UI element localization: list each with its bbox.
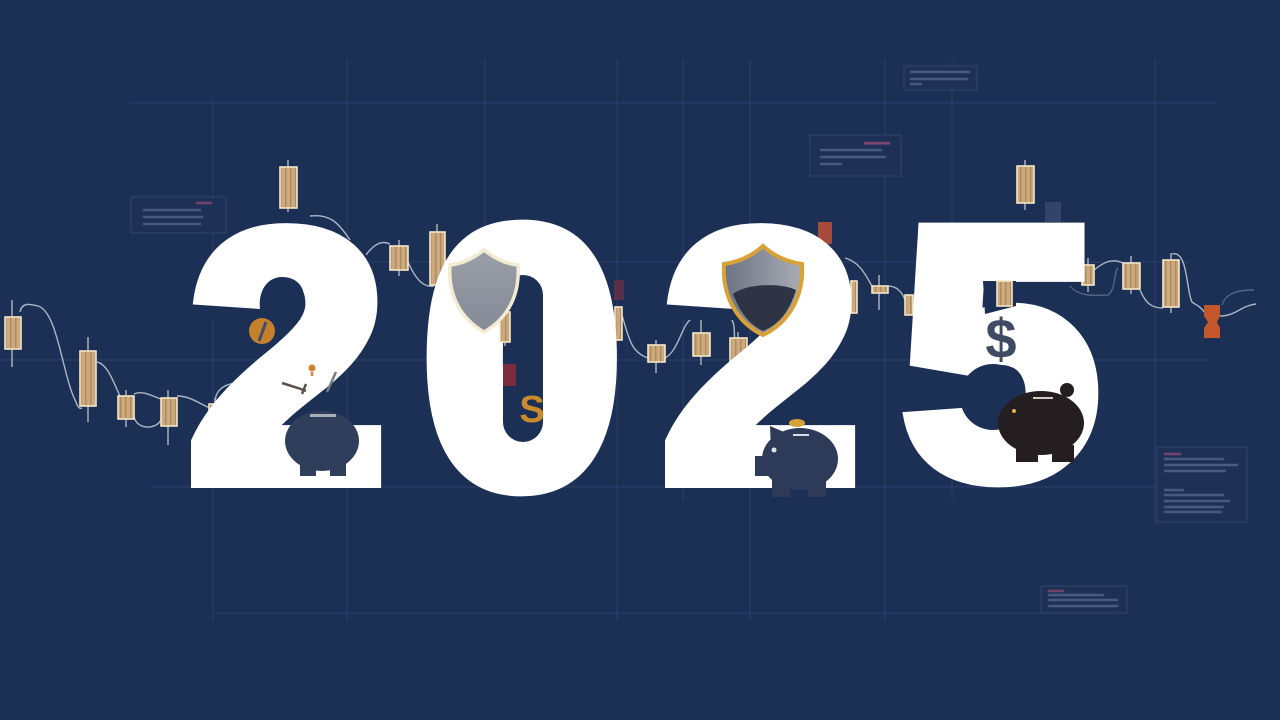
- candle 1: [5, 300, 21, 367]
- candle 7: [390, 240, 408, 276]
- panel: centre top note: [810, 135, 901, 176]
- panel: lower right note: [1041, 586, 1127, 613]
- panel: top note: [904, 66, 977, 90]
- icon: orange coin: [249, 318, 275, 344]
- candle 5: [209, 398, 223, 424]
- candle 3: [118, 390, 134, 427]
- panel: right note: [1157, 447, 1247, 522]
- icon: letter S orange: S: [519, 389, 545, 431]
- candle orange: [1204, 305, 1220, 338]
- icon: dollar sign: $: [985, 307, 1017, 370]
- line chart: connecting curves: [20, 216, 1256, 427]
- candle 19: [1082, 258, 1094, 292]
- icon: piggy bank black: [998, 383, 1084, 462]
- icon: navy blob on five: [960, 364, 1026, 430]
- zero counter: [503, 275, 543, 442]
- candle faded: [1045, 202, 1061, 222]
- panel: upper left note: [131, 197, 226, 233]
- candle red 2: [614, 280, 624, 300]
- candle red 3: [818, 222, 832, 244]
- title: 2025 numerals: 2: [191, 165, 383, 550]
- five: left gap: [895, 364, 975, 412]
- candle in zero counter: [500, 304, 510, 346]
- candle 10: [615, 307, 622, 340]
- candle red in zero counter: [503, 364, 516, 386]
- icon: shield gold: [724, 246, 802, 335]
- candle 8: [430, 224, 445, 292]
- candle 11: [648, 340, 665, 373]
- candle 21: [1163, 253, 1179, 313]
- candle in five notch: [997, 281, 1012, 306]
- candlestick chart: candles: [5, 160, 1220, 445]
- candle 2: [80, 337, 96, 422]
- title: 2025 numerals: 0: [428, 164, 616, 552]
- candle 20: [1123, 256, 1140, 294]
- icon: piggy bank navy: [755, 419, 838, 497]
- five: notch under top bar: [983, 281, 1016, 314]
- icon: small tools: [282, 364, 336, 394]
- candle 6: [280, 160, 297, 212]
- candle 13: [730, 332, 747, 370]
- candle 16: [905, 295, 913, 315]
- icon: piggy bank dark blue: [285, 411, 359, 476]
- second two: inner notch: [660, 277, 778, 320]
- title: 2025 numerals: 2: [665, 165, 857, 550]
- candle 4: [161, 390, 177, 445]
- candle 14: [851, 281, 857, 313]
- candle 18: [1017, 160, 1034, 210]
- icon: shield silver: [450, 250, 518, 332]
- candle 15: [872, 275, 888, 310]
- title: 2025 numerals: [191, 161, 1096, 552]
- first two: inner notch: [186, 277, 304, 320]
- title: 2025 numerals: 5: [904, 161, 1096, 546]
- candle 12: [693, 318, 710, 365]
